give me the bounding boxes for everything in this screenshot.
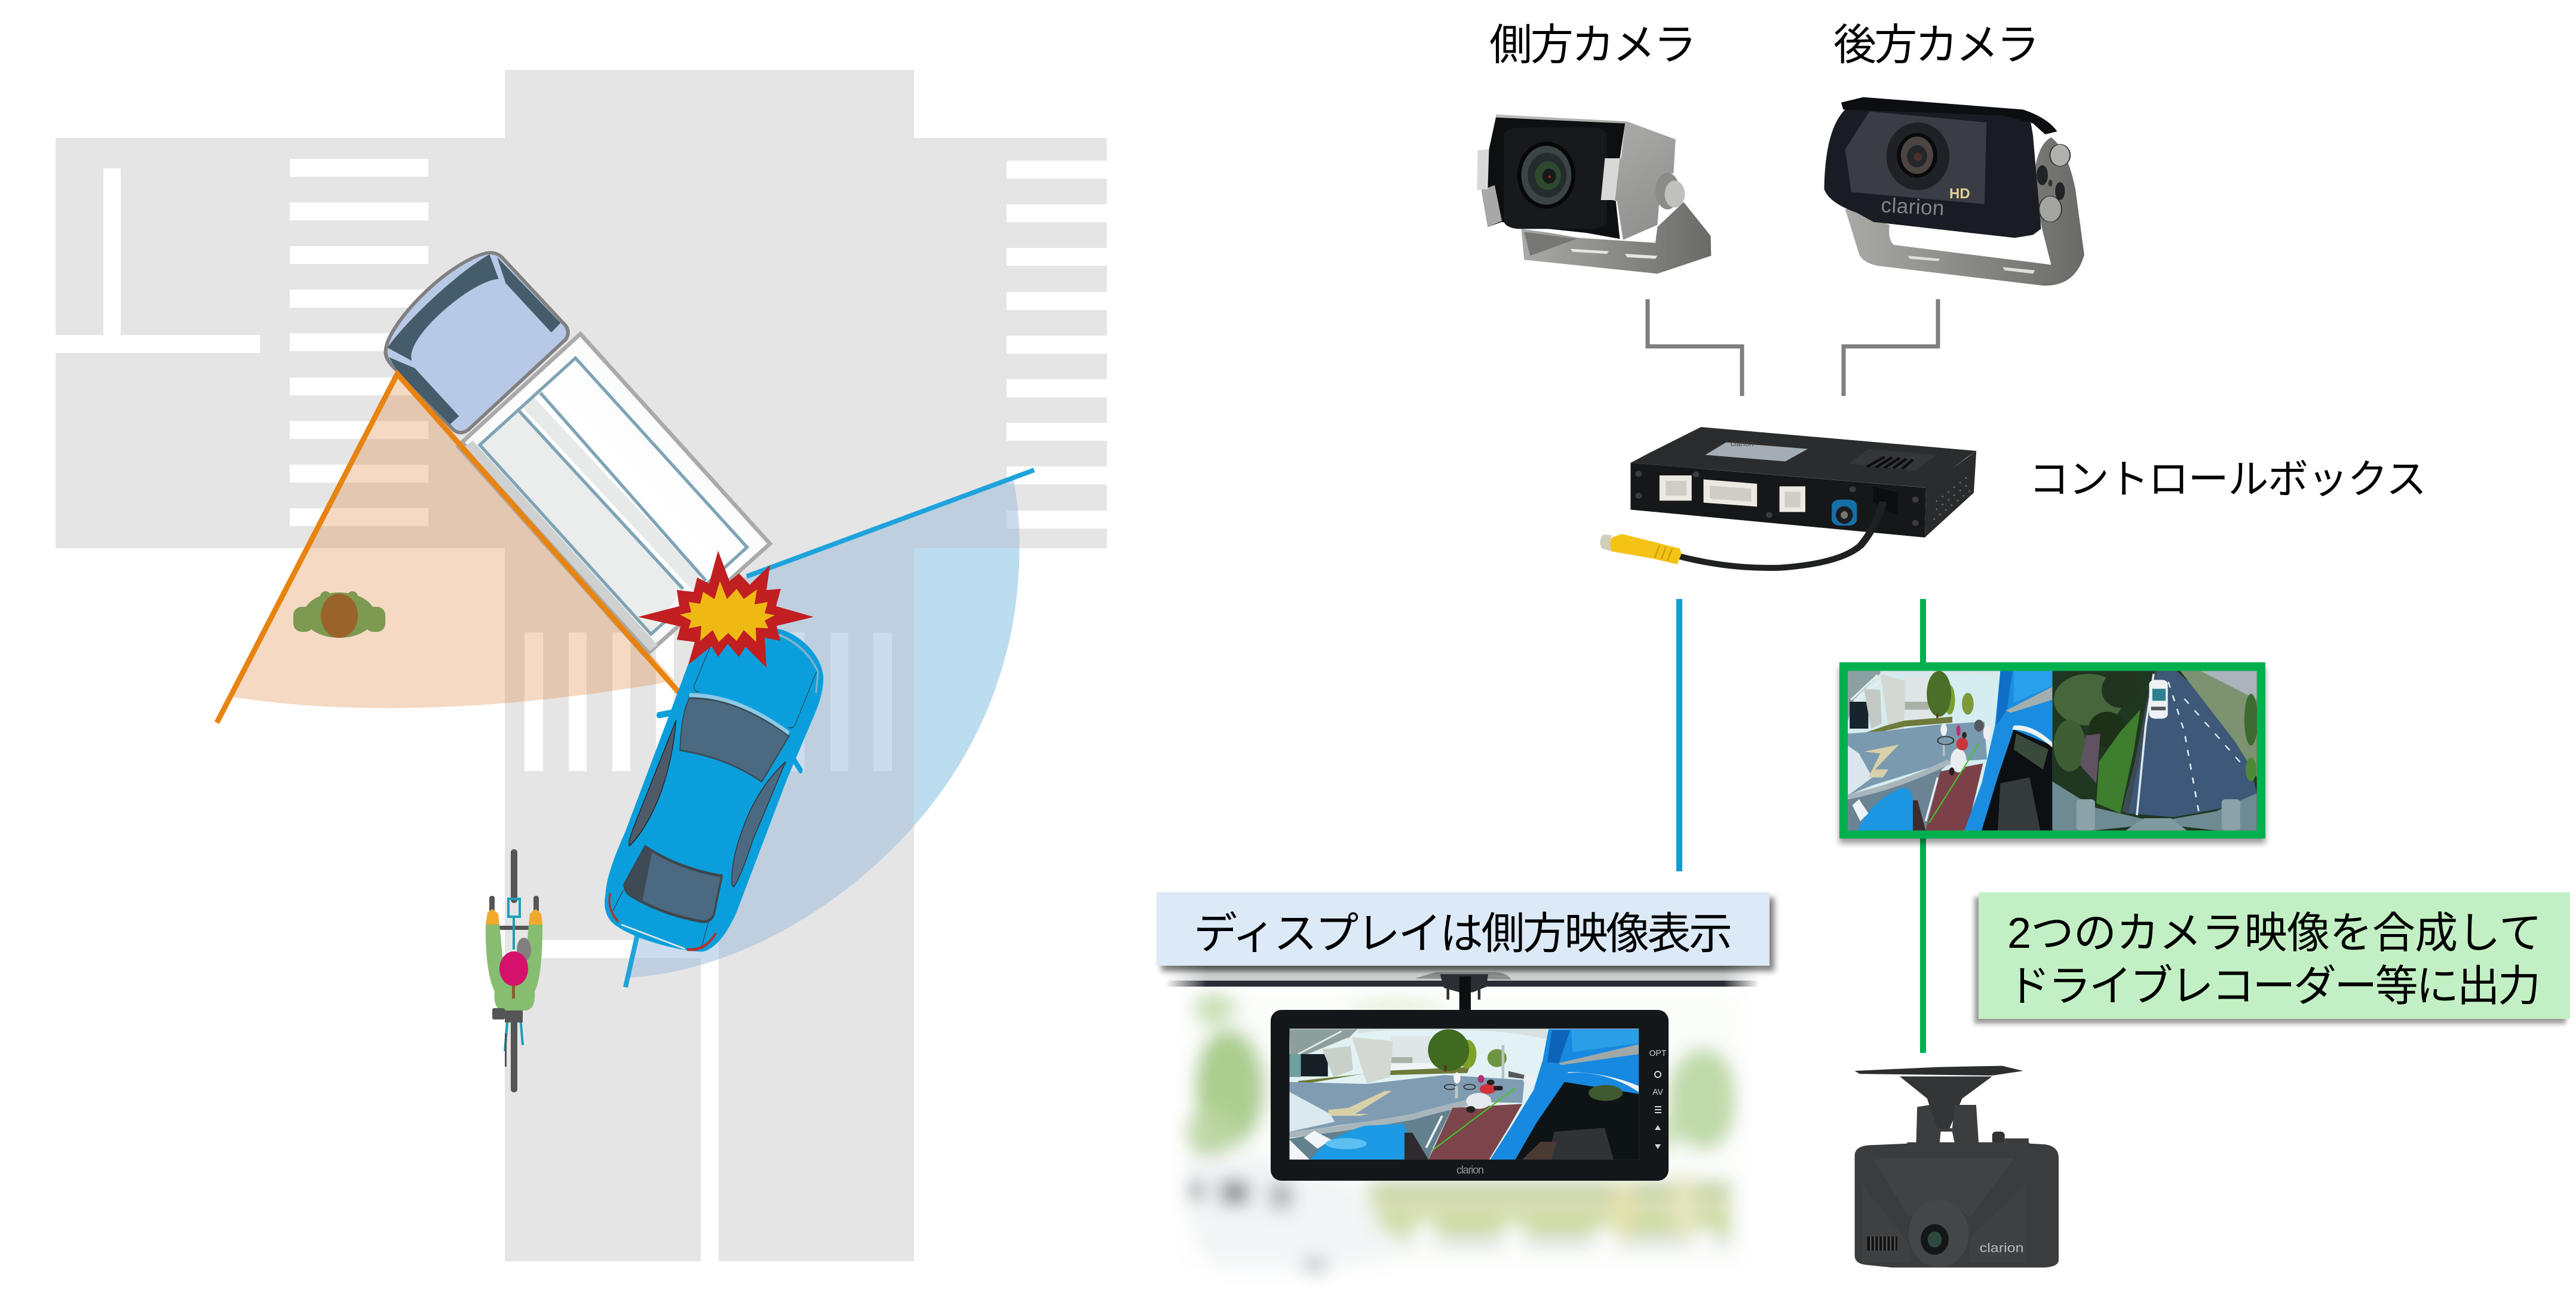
connector lines from cameras [1648, 299, 1938, 396]
display mount [1415, 972, 1511, 1011]
display in vehicle photo [1166, 966, 1758, 1280]
road surface [56, 70, 1107, 1261]
pedestrian [293, 591, 385, 638]
dashcam photo [1855, 1066, 2059, 1267]
label: rear camera: 後方カメラ [1833, 22, 2040, 69]
monitor buttons [1649, 1048, 1667, 1149]
rear camera housing [1824, 97, 2057, 238]
dashcam lens [1909, 1200, 1968, 1267]
blue car [605, 629, 823, 952]
blue view lines [625, 470, 1034, 987]
control box label text: clarion [1731, 439, 1753, 448]
composite right: rear view [2052, 671, 2258, 831]
rear camera bracket [1845, 137, 2084, 285]
rear camera badge HD: HD [1949, 186, 1970, 202]
label: side camera: 側方カメラ [1489, 22, 1697, 69]
dashcam mount [1855, 1066, 2029, 1144]
callout text: ディスプレイは側方映像表示 [1194, 910, 1732, 958]
dashcam logo: clarion [1980, 1241, 2024, 1255]
road markings [56, 159, 1107, 1261]
side camera photo [1477, 115, 1711, 274]
green callout [1979, 892, 2570, 1019]
monitor buttons: AV [1652, 1087, 1663, 1097]
blue camera view fan [630, 480, 1019, 978]
monitor bezel [1271, 1010, 1669, 1181]
monitor buttons: OPT [1649, 1048, 1667, 1058]
control box cable with RCA plug [1600, 502, 1883, 568]
truck bed [455, 334, 770, 657]
blue signal line [1676, 599, 1682, 871]
control box connectors [1660, 475, 1899, 526]
cyclist [486, 849, 542, 1092]
callout line 2: ドライブレコーダー等に出力 [2007, 963, 2541, 1011]
collision burst [638, 551, 814, 668]
side camera hood [1496, 115, 1676, 240]
control box photo [1600, 427, 1976, 568]
rear camera slots [1908, 256, 2035, 274]
orange view lines [217, 374, 679, 723]
side camera bracket [1522, 202, 1711, 274]
callout line 1: 2つのカメラ映像を合成して [2007, 910, 2542, 957]
truck [385, 253, 770, 657]
blue callout [1157, 892, 1770, 966]
rear camera photo [1824, 97, 2084, 285]
control box screws [1635, 471, 1919, 526]
side camera bolt [1655, 173, 1685, 210]
monitor logo: clarion [1456, 1164, 1484, 1176]
side camera body [1477, 118, 1625, 239]
side camera lens [1517, 142, 1575, 208]
composite camera image [1848, 671, 2258, 831]
ceiling bar [1165, 966, 1759, 987]
orange camera view fan [232, 373, 675, 708]
blurred background photo [1111, 932, 1816, 1293]
green signal line [1920, 599, 1926, 1053]
composite left: side view [1848, 671, 2052, 831]
rear camera lens [1887, 122, 1949, 190]
control box casing [1630, 427, 1976, 538]
rear camera bolts [2037, 145, 2070, 222]
monitor screen image [1289, 1028, 1639, 1160]
truck cab [385, 253, 568, 432]
label: control box: コントロールボックス [2029, 457, 2427, 502]
rear camera badge clarion: clarion [1881, 194, 1945, 220]
dashcam body [1855, 1142, 2059, 1267]
green image frame [1839, 662, 2265, 839]
intersection scene [56, 70, 1107, 1261]
